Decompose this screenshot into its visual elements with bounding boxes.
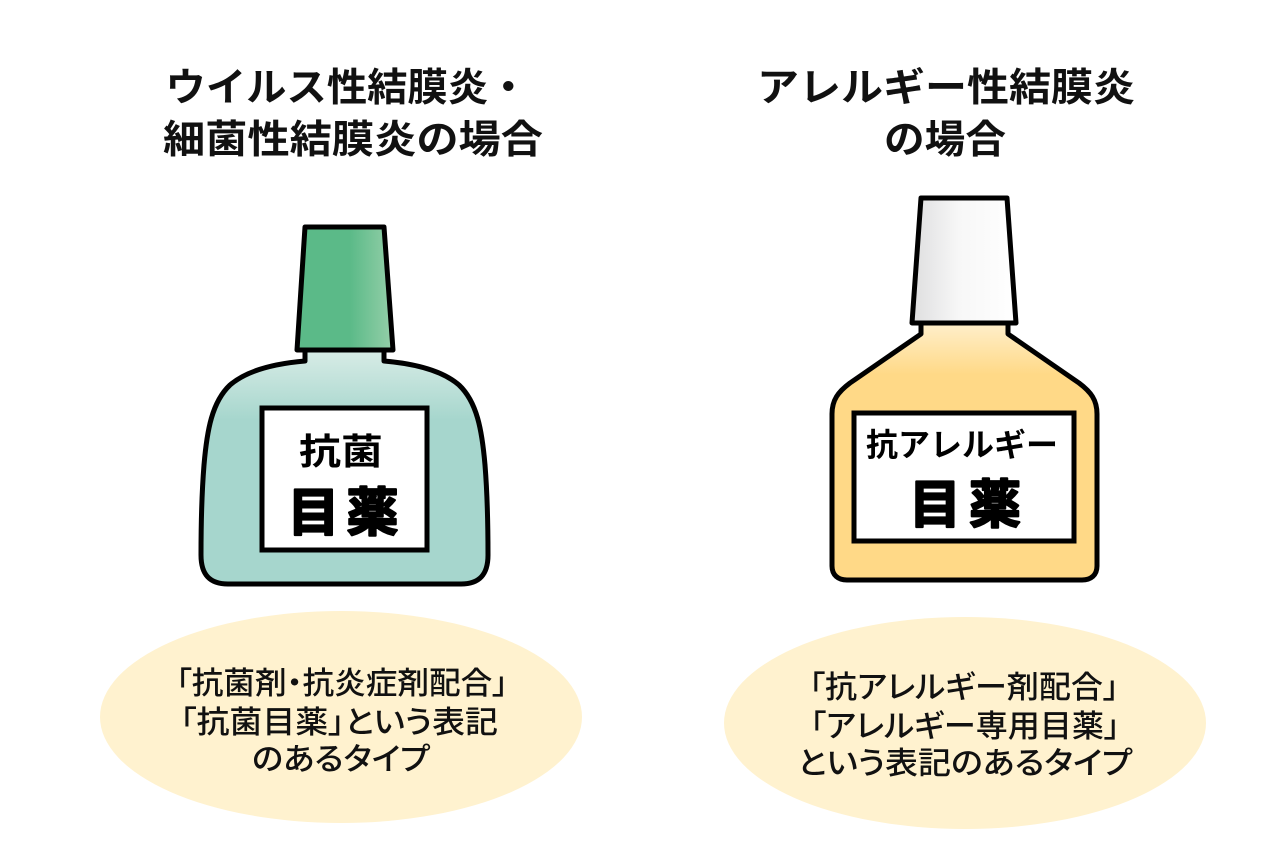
bottle: anti-allergy eye drops <box>832 198 1097 580</box>
label <box>262 408 427 550</box>
bottle cap <box>297 227 393 350</box>
callout text: 「抗菌剤・抗炎症剤配合」 <box>176 666 508 701</box>
callout: antibacterial type <box>100 611 582 823</box>
callout text: 「抗菌目薬」という表記 <box>180 705 498 740</box>
callout text <box>176 666 508 777</box>
label text: eye drops: 目薬 <box>288 485 398 543</box>
callout ellipse <box>724 617 1206 829</box>
bottle body <box>832 323 1097 580</box>
label text: eye drops: 目薬 <box>909 477 1021 535</box>
title: allergic conjunctivitis: の場合 <box>884 119 1006 162</box>
callout text: という表記のあるタイプ <box>798 746 1133 781</box>
title: viral and bacterial conjunctivitis: 細菌性結膜炎の場合 <box>163 119 543 162</box>
callout text: 「アレルギー専用目薬」 <box>810 709 1120 744</box>
label text: antibacterial: 抗菌 <box>299 431 383 472</box>
callout text: 「抗アレルギー剤配合」 <box>809 670 1119 705</box>
label text: anti-allergy: 抗アレルギー <box>866 427 1058 463</box>
title: viral and bacterial conjunctivitis: ウイルス性結膜炎・ <box>166 67 528 110</box>
bottle cap <box>912 198 1016 323</box>
callout text <box>798 670 1133 781</box>
callout: anti-allergy type <box>724 617 1206 829</box>
title: viral and bacterial conjunctivitis <box>163 67 543 162</box>
title: allergic conjunctivitis <box>757 67 1135 162</box>
title: allergic conjunctivitis: アレルギー性結膜炎 <box>757 67 1135 110</box>
bottle: antibacterial eye drops <box>201 227 488 584</box>
callout text: のあるタイプ <box>252 742 431 777</box>
label <box>854 413 1074 541</box>
callout ellipse <box>100 611 582 823</box>
bottle body <box>201 350 488 584</box>
